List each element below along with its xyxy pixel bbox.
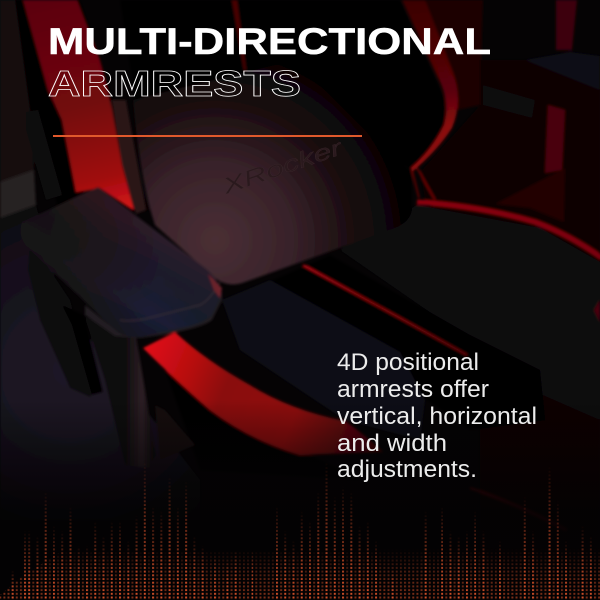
red upper piping on rest — [232, 0, 246, 70]
body text: adjustments. — [337, 456, 477, 483]
piping line right — [417, 202, 600, 258]
right red wing band — [402, 0, 458, 172]
red back band — [23, 0, 134, 210]
red bar top right — [556, 0, 577, 50]
lower red line — [470, 488, 566, 530]
red seat line — [303, 265, 467, 355]
bottom shadow fade — [0, 400, 600, 600]
lower right corner tick — [594, 300, 600, 322]
body text: vertical, horizontal — [337, 403, 537, 430]
seat fabric panel left — [222, 280, 425, 440]
orange divider — [53, 135, 362, 137]
armrest top — [21, 187, 222, 337]
carpet floor — [0, 205, 200, 520]
leather cushion — [133, 60, 412, 284]
arm bracket — [28, 240, 95, 397]
distant chair — [420, 56, 600, 600]
floor patch under post — [155, 405, 195, 460]
skirting board — [0, 170, 36, 218]
armrest underside — [85, 294, 222, 338]
armrest shading — [21, 187, 222, 337]
brown side stitching — [112, 100, 146, 214]
armrest red edge glint — [208, 274, 222, 298]
centre back rest dark — [120, 0, 445, 170]
right arm top — [525, 52, 600, 90]
title line 1: MULTI-DIRECTIONAL — [48, 21, 491, 62]
armrest highlight edge — [120, 282, 220, 321]
embossed logo: XRocker — [218, 134, 347, 199]
body text: and width — [337, 430, 447, 457]
body text: 4D positional — [337, 349, 479, 376]
armrest post — [85, 318, 156, 468]
right wing dim region — [425, 0, 483, 110]
seat cushion inner black gap — [262, 255, 545, 430]
thin red lines — [412, 168, 435, 200]
body text: armrests offer — [337, 376, 489, 403]
dark black seat edge under — [160, 355, 360, 480]
red bar middle right — [545, 105, 565, 173]
body text — [337, 349, 537, 483]
red seat band — [143, 332, 383, 455]
mid block — [483, 85, 535, 118]
left wall — [0, 0, 34, 182]
seat cushion right — [340, 205, 600, 420]
bracket gap — [62, 305, 103, 395]
equaliser dot pattern — [0, 467, 600, 600]
red wedge right — [495, 168, 565, 222]
chair back outer edge — [15, 0, 150, 215]
side bracket — [26, 110, 62, 200]
title line 2 outlined: ARMRESTS — [48, 63, 301, 104]
